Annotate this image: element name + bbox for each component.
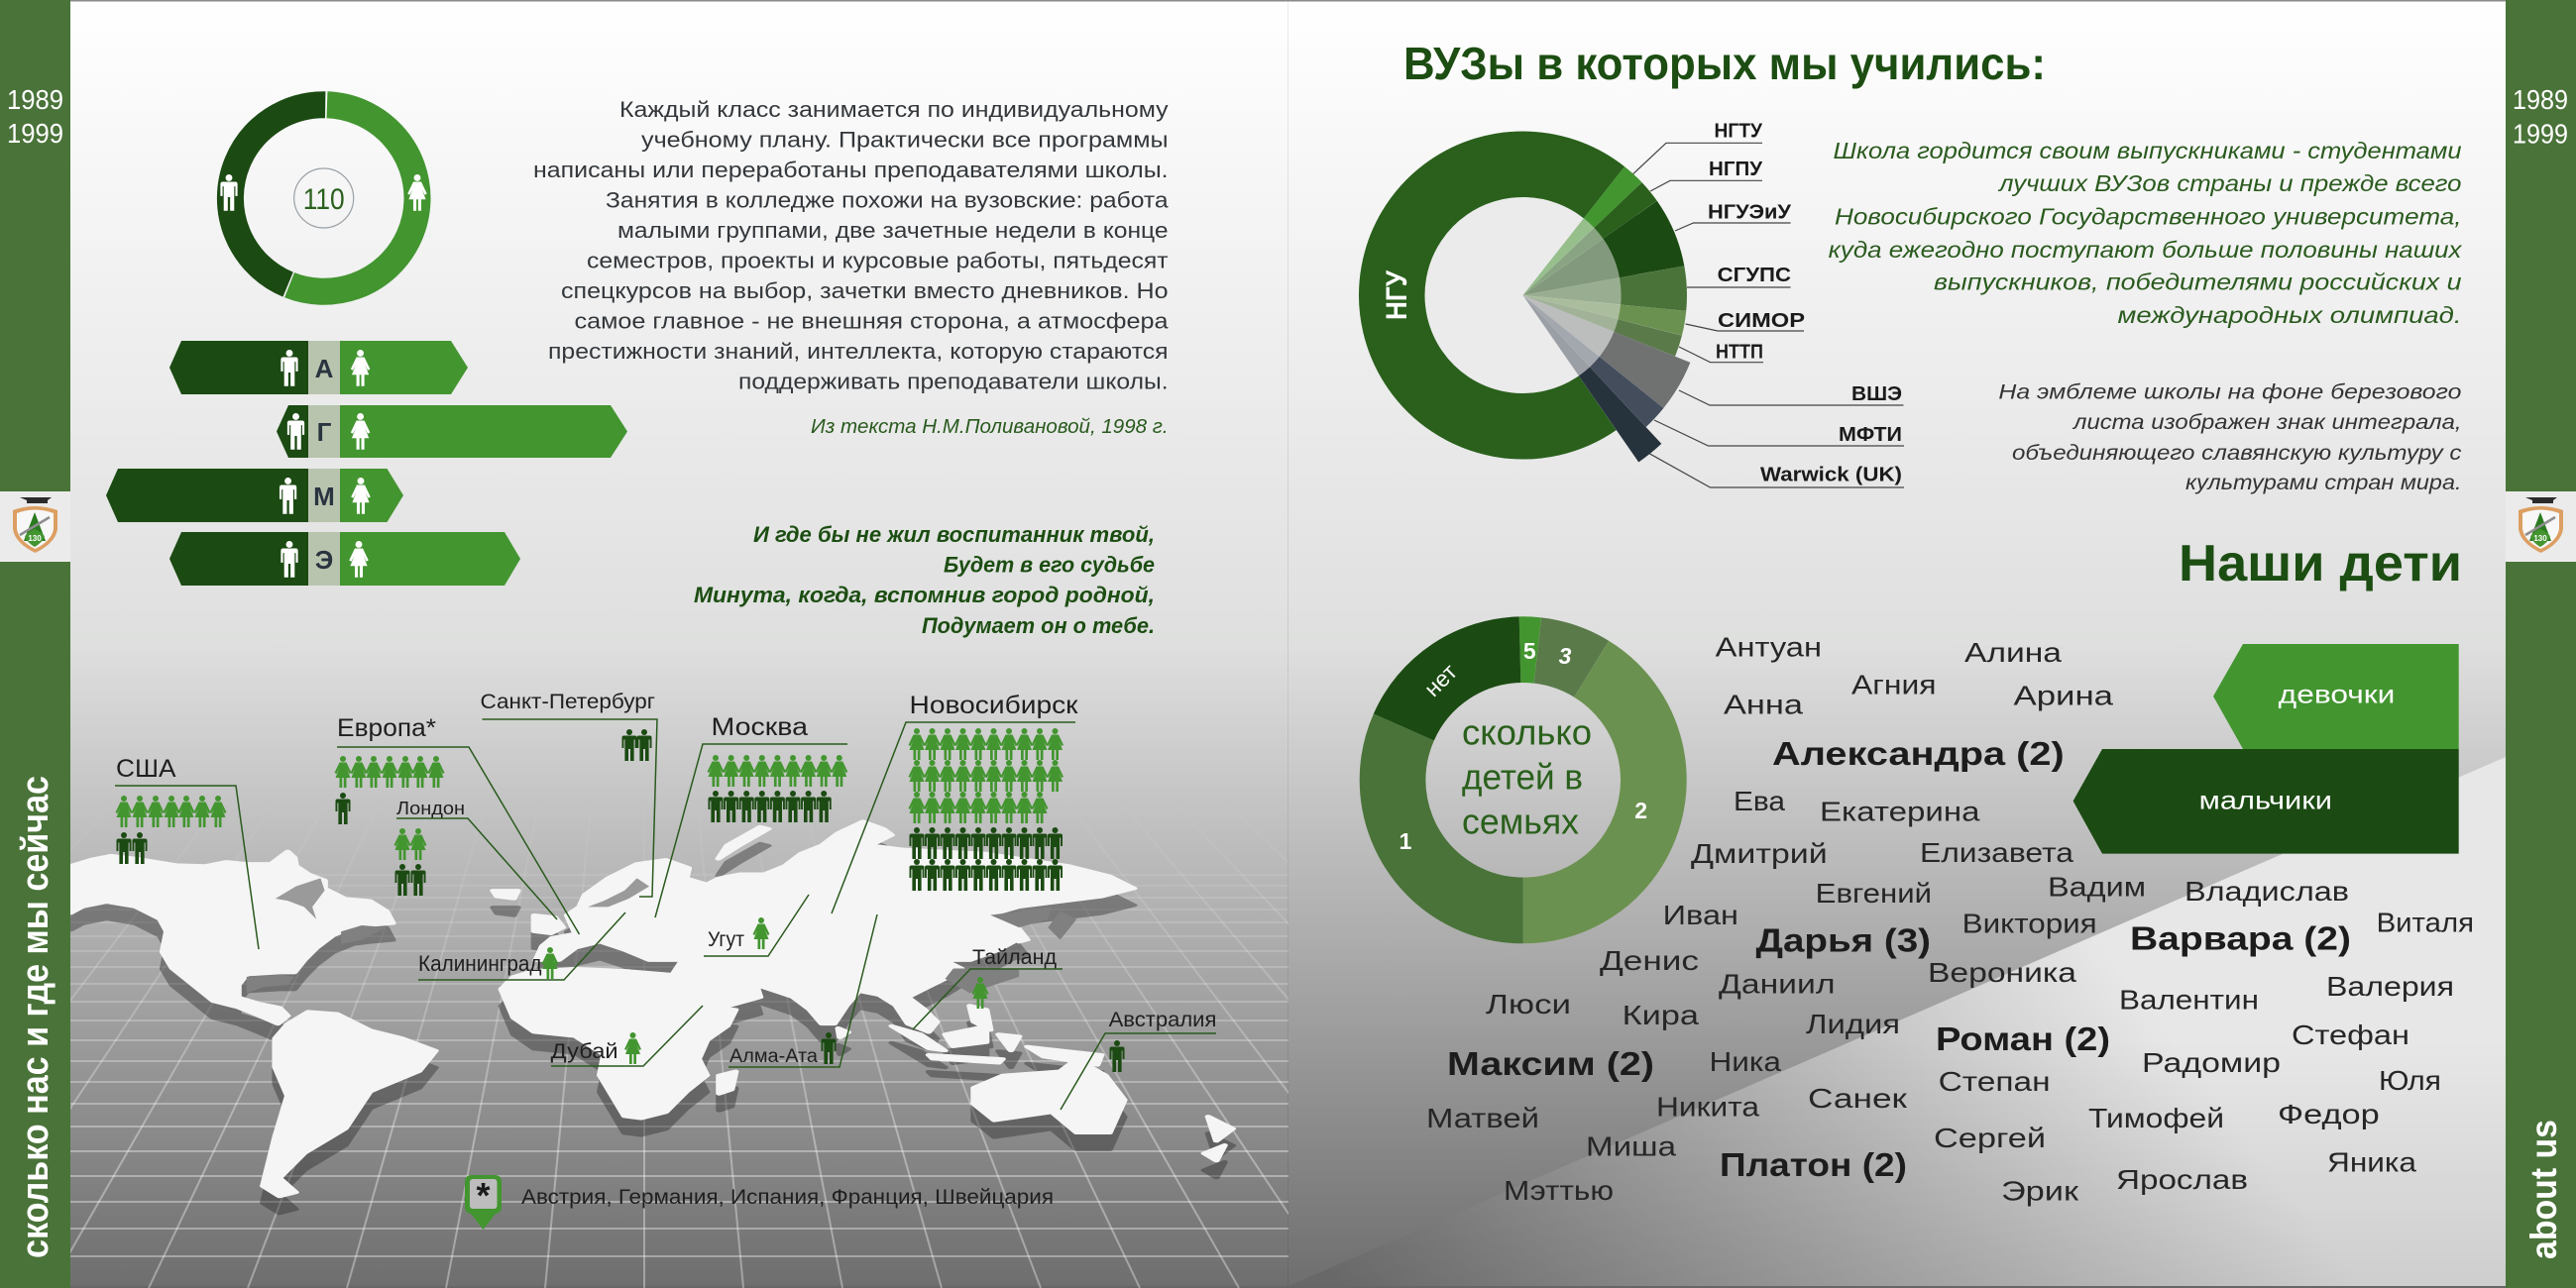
icon: school logo right — [2506, 491, 2576, 562]
label: США — [115, 755, 259, 949]
label: Австралия: Австралия — [1109, 1009, 1216, 1031]
name cloud: Радомир — [2142, 1047, 2281, 1078]
panel: world map — [70, 693, 1288, 1288]
label: Европа: Европа* — [337, 714, 436, 742]
text block: graduates: выпускников, победителями российских и — [1934, 269, 2462, 295]
repeated names in bold: Роман (2) — [1936, 1020, 2110, 1057]
name cloud: Владислав — [2184, 876, 2349, 907]
repeated names in bold — [1447, 735, 2351, 1183]
name cloud: Антуан — [1716, 632, 1822, 662]
chart: class gender bars — [106, 341, 627, 586]
text block: school description: спецкурсов на выбор, зачетки вместо дневников. Но — [561, 278, 1169, 303]
label: Угут: Угут — [708, 928, 744, 951]
center caption: семьях — [1462, 802, 1579, 842]
chart: universities radial — [1310, 82, 1904, 508]
label: Новосибирск — [832, 692, 1079, 913]
name cloud: Степан — [1939, 1066, 2051, 1097]
total count: 110 — [303, 183, 345, 216]
label: Тайланд — [913, 946, 1063, 1029]
segment values: нет — [1419, 658, 1462, 701]
text block: graduates: Школа гордится своим выпускниками - студентами — [1834, 138, 2462, 163]
text block: school description: самое главное - не внешняя сторона, а атмосфера — [575, 309, 1169, 333]
label: Санкт-Петербург — [480, 691, 657, 897]
legend: boys arrow — [2073, 749, 2459, 854]
center caption: детей в — [1462, 757, 1583, 798]
leader lines and university labels: СИМОР — [1718, 310, 1805, 332]
repeated names in bold: Дарья (3) — [1756, 922, 1931, 959]
label: Москва — [655, 713, 847, 917]
bar: А: А — [315, 354, 334, 383]
segment values: 1 — [1400, 828, 1412, 854]
leader lines and university labels: МФТИ — [1839, 424, 1902, 446]
text block: school description: малыми группами, две зачетные недели в конце — [617, 218, 1169, 243]
text block: emblem: листа изображен знак интеграла, — [2072, 411, 2462, 434]
name cloud: Иван — [1663, 900, 1738, 930]
label: Угут — [704, 895, 809, 956]
map legend: pin and countries: Австрия, Германия, Испания, Франция, Швейцария — [521, 1186, 1054, 1209]
text block: emblem: культурами стран мира. — [2185, 472, 2462, 494]
text block: poem: Будет в его судьбе — [944, 553, 1155, 577]
leader lines and university labels: НТТП — [1716, 342, 1763, 364]
bar: А — [169, 341, 468, 394]
text block: poem: Подумает он о тебе. — [922, 613, 1155, 638]
label: Австралия — [1061, 1009, 1216, 1110]
label: Европа — [335, 714, 579, 934]
segment values: 5 — [1523, 638, 1536, 664]
name cloud: Елизавета — [1920, 837, 2073, 868]
label: Москва: Москва — [712, 713, 808, 741]
segment values — [1400, 638, 1647, 854]
leader lines and university labels: НГТУ — [1715, 120, 1763, 142]
center caption — [1462, 712, 1592, 842]
repeated names in bold: Платон (2) — [1720, 1146, 1907, 1183]
name cloud: Валентин — [2119, 985, 2259, 1016]
name cloud: Миша — [1586, 1131, 1677, 1162]
label: Лондон — [394, 799, 557, 919]
name cloud: Вероника — [1928, 957, 2077, 988]
repeated names in bold: Александра (2) — [1772, 735, 2065, 772]
label: США: США — [116, 755, 176, 783]
text block: school description: семестров, проекты и курсовые работы, пятьдесят — [587, 248, 1169, 273]
years: 1999 — [7, 118, 63, 149]
bar: Э — [169, 532, 520, 586]
bar: Г: Г — [317, 417, 332, 447]
years: 1989 — [7, 84, 63, 115]
text block: school description: Каждый класс занимается по индивидуальному — [619, 97, 1169, 122]
leader lines and university labels: НГПУ — [1709, 159, 1763, 180]
label: Дубай — [551, 1006, 703, 1066]
text block: emblem — [1998, 381, 2462, 494]
name cloud: Виталя — [2377, 908, 2474, 938]
name cloud: Ева — [1734, 786, 1785, 816]
center caption: сколько — [1462, 712, 1592, 753]
text block: school description: Занятия в колледже похожи на вузовские: работа — [606, 188, 1169, 212]
years: 1999 — [2513, 119, 2568, 149]
heading: universities: ВУЗы в которых мы учились: — [1403, 38, 2046, 89]
icon: woman — [407, 174, 427, 211]
text block: emblem: объединяющего славянскую культуру с — [2012, 442, 2462, 465]
years — [7, 84, 63, 149]
name cloud: Люси — [1486, 989, 1571, 1020]
legend: boys arrow: мальчики — [2199, 785, 2332, 814]
name cloud: Ярослав — [2116, 1164, 2248, 1195]
leader lines and university labels: ВШЭ — [1851, 383, 1902, 405]
segment values: 3 — [1559, 643, 1572, 669]
text block: graduates: лучших ВУЗов страны и прежде всего — [1997, 170, 2462, 196]
name cloud: Эрик — [2001, 1176, 2079, 1207]
name cloud: Никита — [1656, 1092, 1759, 1123]
text block: poem: И где бы не жил воспитанник твой, — [753, 522, 1155, 547]
text block: graduates: куда ежегодно поступают больше половины наших — [1829, 237, 2463, 263]
label: Санкт-Петербург: Санкт-Петербург — [480, 691, 655, 713]
name cloud — [1426, 632, 2474, 1207]
leader lines and university labels: СГУПС — [1718, 265, 1791, 286]
text block: school description — [533, 97, 1169, 394]
bar: Г — [277, 405, 627, 458]
name cloud: Валерия — [2326, 971, 2454, 1002]
years — [2513, 84, 2568, 149]
text block: graduates — [1829, 138, 2463, 328]
name cloud: Матвей — [1426, 1103, 1539, 1133]
name cloud: Арина — [2014, 681, 2114, 711]
name cloud: Санек — [1808, 1083, 1908, 1114]
name cloud: Мэттью — [1504, 1175, 1614, 1206]
label: Алма-Ата — [728, 914, 877, 1067]
leader lines and university labels: НГУЭиУ — [1708, 202, 1792, 224]
name cloud: Анна — [1724, 690, 1804, 719]
text block: graduates: Новосибирского Государственного университета, — [1835, 204, 2462, 230]
name cloud: Дмитрий — [1691, 838, 1828, 869]
icon: school logo left: 130 — [28, 534, 42, 543]
leader lines and university labels — [1633, 120, 1904, 487]
name cloud: Екатерина — [1820, 797, 1980, 827]
heading: our children: Наши дети — [2179, 535, 2462, 592]
name cloud: Сергей — [1934, 1123, 2046, 1153]
name cloud: Виктория — [1962, 908, 2097, 939]
name cloud: Лидия — [1806, 1009, 1900, 1039]
segment label: НГУ: НГУ — [1381, 270, 1413, 320]
panel: left sidebar — [0, 0, 70, 1288]
name cloud: Вадим — [2048, 872, 2146, 902]
vertical heading: сколько нас и где мы сейчас — [15, 776, 56, 1258]
name cloud: Агния — [1851, 669, 1937, 699]
legend: girls arrow: девочки — [2279, 679, 2395, 708]
leader lines and university labels: Warwick (UK) — [1760, 465, 1902, 486]
text block: poem — [694, 522, 1155, 638]
legend: girls arrow — [2213, 644, 2459, 749]
text block: poem: Минута, когда, вспомнив город родной, — [694, 583, 1155, 607]
icon: man — [220, 174, 238, 211]
name cloud: Кира — [1623, 1000, 1700, 1030]
text block: school description: престижности знаний, интеллекта, которую стараются — [548, 339, 1169, 364]
text block: school description: учебному плану. Практически все программы — [641, 127, 1169, 153]
bar: М — [106, 469, 403, 522]
repeated names in bold: Максим (2) — [1447, 1045, 1654, 1082]
name cloud: Стефан — [2292, 1020, 2409, 1050]
repeated names in bold: Варвара (2) — [2130, 919, 2351, 957]
map legend: pin and countries — [465, 1175, 1054, 1230]
text block: source: Из текста Н.М.Поливановой, 1998 г. — [811, 416, 1169, 438]
bar: Э: Э — [315, 545, 333, 575]
label: Дубай: Дубай — [551, 1040, 618, 1063]
chart: class gender donut — [201, 76, 446, 320]
icon: school logo right: 130 — [2533, 534, 2547, 543]
panel: right sidebar — [2506, 0, 2576, 1288]
label: Тайланд: Тайланд — [972, 946, 1057, 969]
map legend: pin and countries: * — [476, 1175, 491, 1216]
name cloud: Федор — [2278, 1099, 2380, 1129]
name cloud: Тимофей — [2088, 1103, 2224, 1133]
text block: emblem: На эмблеме школы на фоне березового — [1998, 381, 2462, 404]
vertical heading: about us — [2523, 1120, 2564, 1259]
chart: children in families donut — [1344, 600, 1703, 959]
name cloud: Даниил — [1719, 969, 1836, 1000]
text block: school description: написаны или переработаны преподавателями школы. — [533, 158, 1169, 182]
segment values: 2 — [1634, 798, 1647, 823]
label: Калининград: Калининград — [418, 951, 542, 976]
years: 1989 — [2513, 84, 2568, 115]
total count — [294, 168, 354, 228]
name cloud: Юля — [2379, 1065, 2441, 1096]
name cloud: Денис — [1600, 945, 1699, 976]
label: Калининград — [418, 912, 625, 980]
name cloud: Яника — [2327, 1147, 2416, 1178]
label: Лондон: Лондон — [396, 799, 465, 818]
name cloud: Евгений — [1816, 878, 1932, 909]
text block: graduates: международных олимпиад. — [2117, 302, 2462, 328]
icon: school logo left — [0, 491, 70, 562]
name cloud: Алина — [1964, 637, 2062, 668]
label: Новосибирск: Новосибирск — [910, 692, 1079, 719]
label: Алма-Ата: Алма-Ата — [729, 1046, 818, 1067]
name cloud: Ника — [1709, 1046, 1781, 1077]
text block: school description: поддерживать преподаватели школы. — [738, 370, 1169, 394]
bar: М: М — [313, 482, 335, 511]
